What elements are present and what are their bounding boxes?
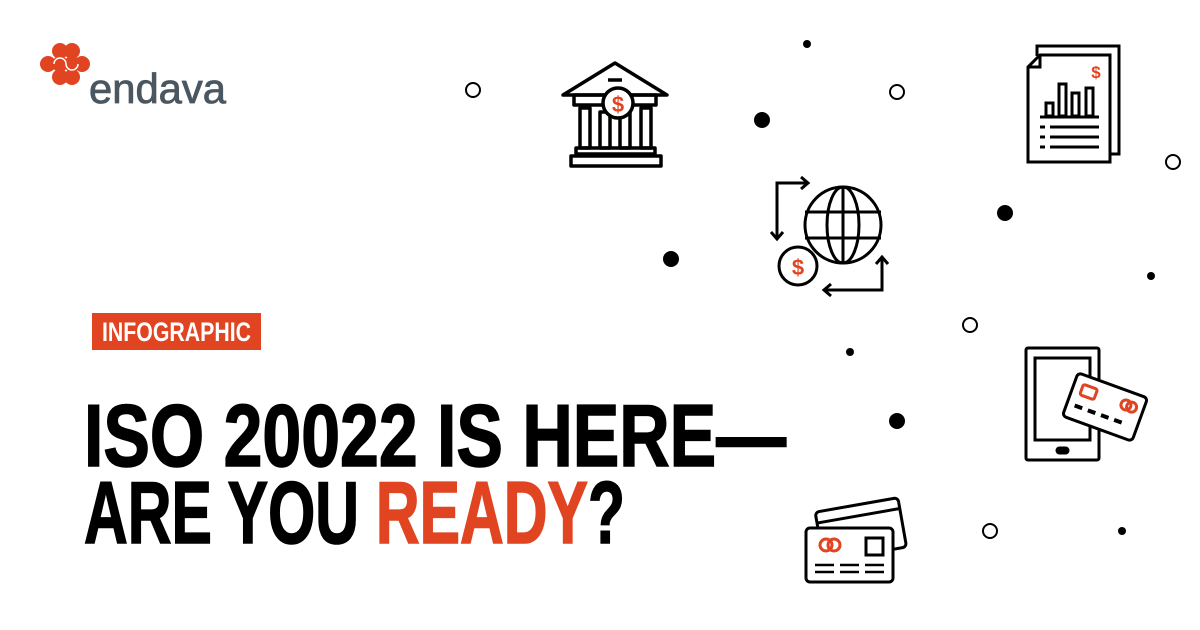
icon: financial report document: $ — [1091, 63, 1101, 82]
icon: tablet with card — [1026, 348, 1148, 460]
title — [84, 386, 786, 562]
title: ISO 20022 IS HERE— — [84, 386, 786, 485]
icon: globe with currency exchange — [771, 177, 888, 296]
decorative dots — [466, 40, 1180, 538]
icon: bank: $ — [612, 92, 624, 117]
icon: globe with currency exchange: $ — [792, 255, 804, 280]
logo text: endava — [89, 65, 227, 112]
icon: financial report document — [1028, 46, 1119, 162]
logo mark — [40, 43, 90, 85]
tag: INFOGRAPHIC — [92, 313, 261, 350]
icon: credit cards — [806, 498, 907, 582]
tag: INFOGRAPHIC: INFOGRAPHIC — [102, 317, 251, 347]
logo: endava — [40, 43, 227, 112]
title: ARE YOU READY? — [84, 463, 625, 562]
icon: bank — [563, 63, 667, 166]
